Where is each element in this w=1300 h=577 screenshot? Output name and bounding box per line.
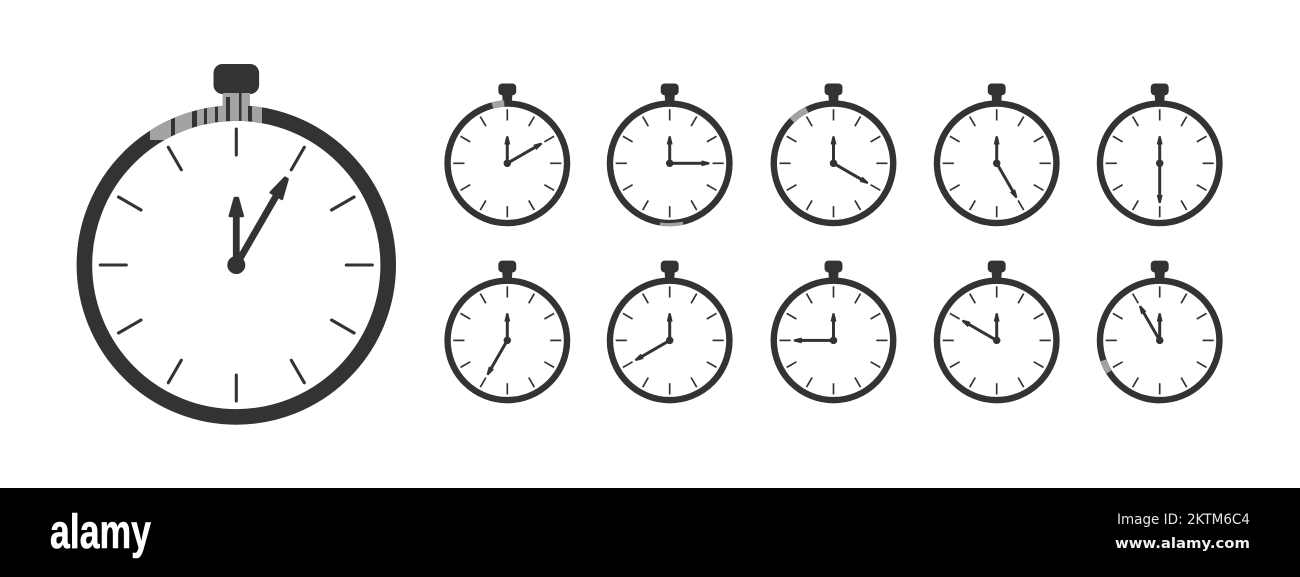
website url: www.alamy.com <box>1115 536 1250 552</box>
small stopwatch: 4 o'clock <box>774 84 893 223</box>
large stopwatch showing 1 o'clock <box>84 64 388 417</box>
small stopwatch: 10 o'clock <box>937 261 1056 400</box>
small stopwatch: 11 o'clock <box>1100 261 1219 400</box>
watermark patches on small stopwatches <box>492 104 1109 372</box>
watermark fragment on large stopwatch <box>150 93 262 140</box>
footer bar <box>0 488 1300 577</box>
small stopwatch: 6 o'clock <box>1100 84 1219 223</box>
small stopwatch: 2 o'clock <box>448 84 567 223</box>
small stopwatch: 5 o'clock <box>937 84 1056 223</box>
small stopwatch: 9 o'clock <box>774 261 893 400</box>
small stopwatch: 7 o'clock <box>448 261 567 400</box>
small stopwatch: 3 o'clock <box>610 84 729 223</box>
small stopwatch: 8 o'clock <box>610 261 729 400</box>
alamy logo: alamy <box>50 506 151 559</box>
image id: Image ID: 2KTM6C4 <box>1117 512 1250 528</box>
